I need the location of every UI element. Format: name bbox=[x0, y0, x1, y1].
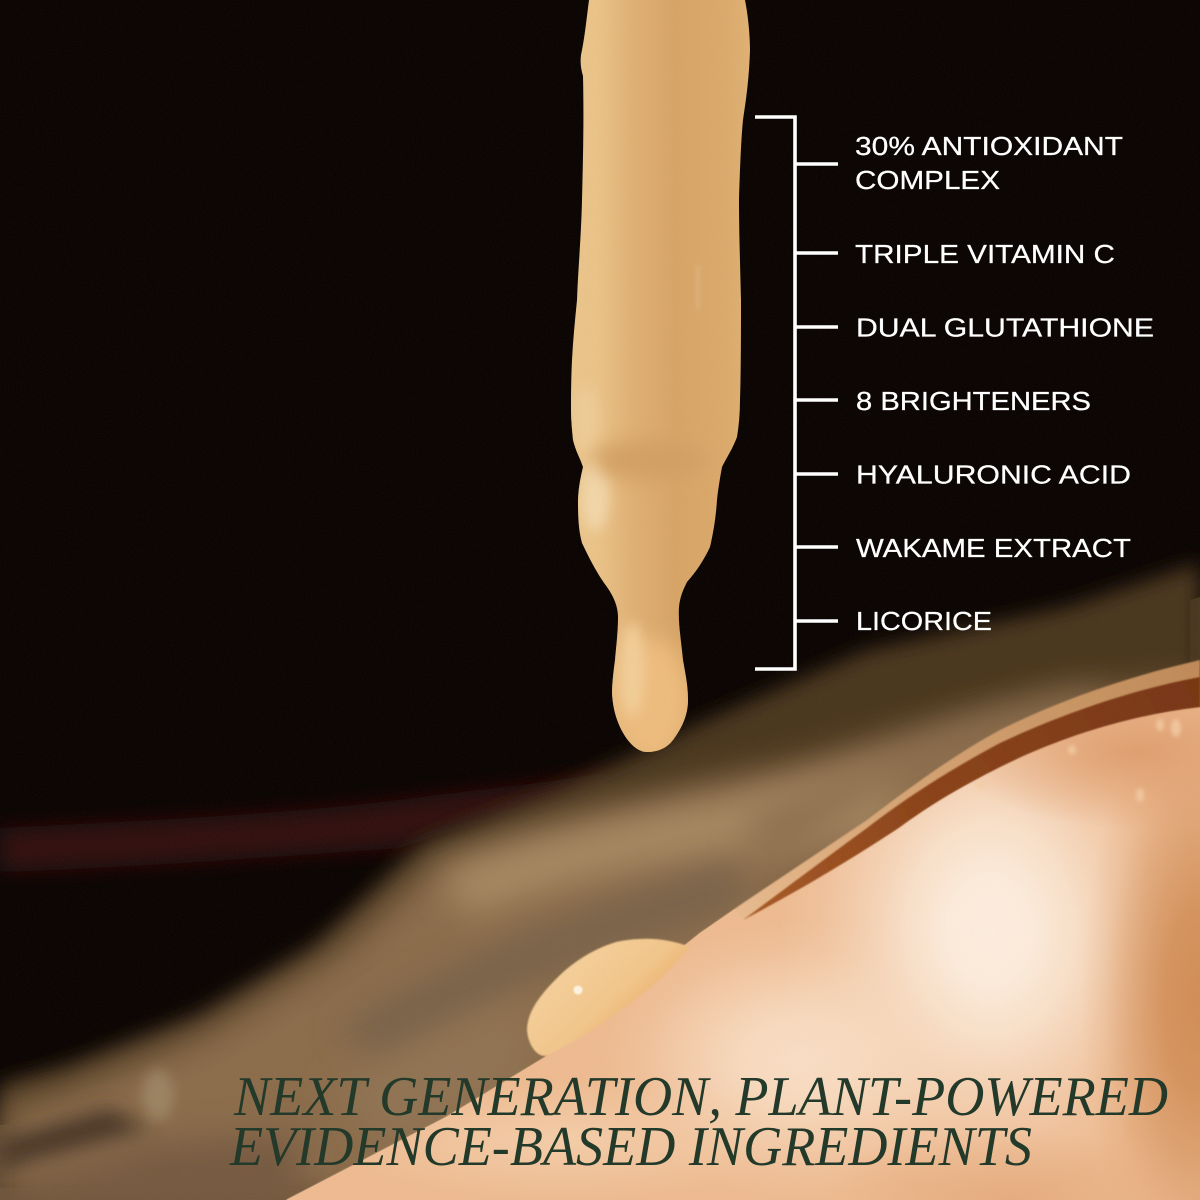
ingredient: dual glutathione: DUAL GLUTATHIONE bbox=[856, 312, 1154, 342]
ingredient: 30% antioxidant complex: COMPLEX bbox=[855, 165, 1000, 195]
serum droplet on skin bbox=[527, 939, 690, 1056]
dark red reflection band bbox=[0, 770, 620, 872]
ingredient: hyaluronic acid: HYALURONIC ACID bbox=[856, 460, 1131, 490]
skin rim bbox=[286, 660, 1200, 1200]
heading: EVIDENCE-BASED INGREDIENTS bbox=[229, 1116, 1032, 1178]
heading: NEXT GENERATION, PLANT-POWERED bbox=[233, 1066, 1168, 1128]
ingredient list bbox=[855, 131, 1154, 636]
ingredient: 30% antioxidant complex bbox=[855, 131, 1123, 195]
heading bbox=[229, 1066, 1168, 1178]
ingredient: triple vitamin C: TRIPLE VITAMIN C bbox=[855, 239, 1115, 269]
lit skin bbox=[280, 660, 1200, 1200]
ingredient: 30% antioxidant complex: 30% ANTIOXIDANT bbox=[855, 131, 1123, 161]
ingredient: 8 brighteners: 8 BRIGHTENERS bbox=[856, 386, 1091, 416]
lens glare bbox=[142, 1069, 174, 1121]
skin highlights near crease bbox=[976, 719, 1181, 802]
edge fill strips bbox=[0, 1125, 12, 1200]
blurred shoulder in the background bbox=[0, 563, 1200, 1200]
serum dropper stream bbox=[565, 0, 755, 762]
ingredient: licorice: LICORICE bbox=[856, 606, 992, 636]
skin surface in the foreground bbox=[280, 660, 1200, 1200]
ingredient: wakame extract: WAKAME EXTRACT bbox=[856, 533, 1131, 563]
ingredient bracket bbox=[755, 117, 838, 669]
skin crease bbox=[743, 677, 1200, 920]
